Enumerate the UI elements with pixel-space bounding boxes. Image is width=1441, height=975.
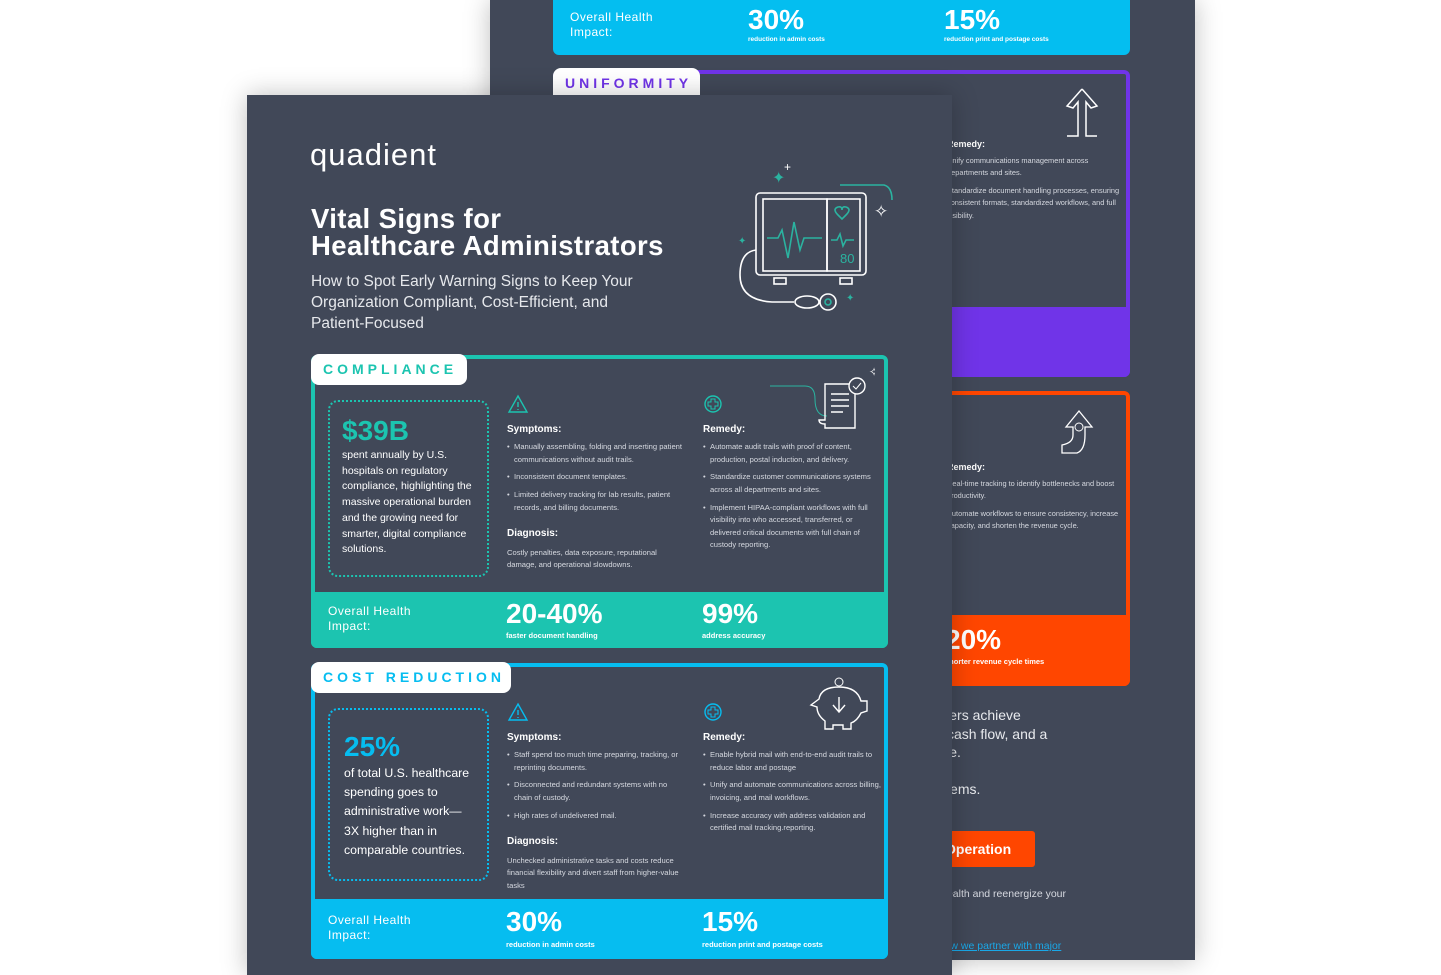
back: cost impact bar	[553, 0, 1130, 55]
impact bar: cost reduction: reduction print and postage costs	[702, 940, 823, 949]
symptoms column: Symptoms:	[507, 732, 561, 743]
back: closing text: minor problems.	[880, 780, 980, 796]
icon: patient monitor	[738, 160, 893, 311]
stat box: $39B: $39B	[342, 415, 409, 446]
remedy column	[703, 395, 871, 549]
icon: medical cross	[704, 395, 722, 413]
symptoms column	[507, 394, 682, 569]
back: orange panel: Real-time tracking to identify bottlenecks and boost productivity.	[947, 479, 1114, 500]
back page: al health and reenergize your	[930, 888, 1066, 900]
symptoms column: Costly penalties, data exposure, reputational damage, and operational slowdowns.	[507, 548, 657, 569]
remedy column: Increase accuracy with address validation and certified mail tracking.reporting.	[710, 811, 865, 832]
back: uniformity tab: UNIFORMITY	[565, 75, 692, 91]
back: orange panel	[553, 391, 1130, 686]
remedy column: Unify and automate communications across billing, invoicing, and mail workflows.	[710, 780, 881, 802]
impact bar: compliance: 99%	[702, 598, 758, 629]
back: uniformity panel: Unify communications management across departments and sites.	[947, 156, 1088, 177]
back: orange panel: shorter revenue cycle times	[945, 657, 1044, 666]
impact bar: compliance: 20-40%	[506, 598, 603, 629]
title: Vital Signs for	[311, 203, 501, 234]
logo: quadient	[310, 137, 437, 172]
title	[311, 203, 664, 261]
impact bar: compliance: Overall Health	[328, 604, 411, 618]
panel: cost reduction	[311, 663, 888, 959]
impact bar: compliance: address accuracy	[702, 631, 765, 640]
symptoms column: Staff spend too much time preparing, tracking, or reprinting documents.	[514, 750, 678, 772]
symptoms column: Disconnected and redundant systems with no chain of custody.	[514, 780, 667, 802]
back: uniformity panel: Remedy:	[947, 139, 985, 149]
icon: arrow gear	[1061, 410, 1094, 454]
symptoms column: Unchecked administrative tasks and costs reduce financial flexibility and divert staff from higher-value tasks	[507, 856, 679, 890]
back: cost impact bar: 15%	[944, 4, 1000, 35]
back: cost impact bar: reduction in admin costs	[748, 36, 825, 43]
title: Healthcare Administrators	[311, 230, 664, 261]
icon: patient monitor: 80	[840, 251, 854, 266]
back page	[490, 0, 1195, 960]
icon: patient monitor: ✧	[874, 202, 888, 221]
back: CTA button	[890, 831, 1035, 867]
remedy column: Implement HIPAA-compliant workflows with full visibility into who accessed, transferred, or delivered critical documents with full chain of custody reporting.	[710, 503, 868, 549]
icon: arrows up	[1066, 88, 1098, 137]
back: cost impact bar: Overall Health	[570, 10, 653, 24]
back: cost impact bar: 30%	[748, 4, 804, 35]
back: orange panel: Remedy:	[947, 462, 985, 472]
icon: warning	[508, 702, 528, 721]
back: closing text: r experience.	[880, 744, 961, 760]
symptoms column: High rates of undelivered mail.	[514, 811, 617, 820]
back: orange panel: 20%	[945, 624, 1001, 655]
icon: patient monitor: ✦	[738, 236, 746, 247]
back: cost impact bar: reduction print and postage costs	[944, 36, 1049, 43]
icon: patient monitor: ✦	[846, 293, 854, 304]
tab: cost reduction: COST REDUCTION	[323, 669, 505, 685]
remedy column: Automate audit trails with proof of content, production, postal induction, and delivery.	[710, 442, 852, 464]
impact bar: cost reduction: Overall Health	[328, 913, 411, 927]
stat box: $39B: spent annually by U.S. hospitals on regulatory compliance, highlighting the massive operational burden and the growing need for smarter, digital compliance solutions.	[342, 449, 472, 555]
impact bar: cost reduction: 30%	[506, 906, 562, 937]
icon: patient monitor: +	[784, 160, 791, 174]
tab: compliance	[311, 354, 467, 385]
back: closing text	[880, 707, 1048, 796]
symptoms column: Inconsistent document templates.	[514, 472, 627, 481]
tab: compliance: COMPLIANCE	[323, 361, 457, 377]
icon: patient monitor: ✦	[772, 170, 785, 187]
remedy column: Enable hybrid mail with end-to-end audit trails to reduce labor and postage	[710, 750, 872, 772]
impact bar: compliance: faster document handling	[506, 631, 598, 640]
impact bar: compliance: Impact:	[328, 619, 371, 633]
back: uniformity tab	[553, 68, 700, 98]
subtitle: How to Spot Early Warning Signs to Keep Your Organization Compliant, Cost-Efficient, and Patient-Focused	[311, 273, 633, 332]
impact bar: compliance	[311, 592, 888, 648]
stat box: 25%: of total U.S. healthcare spending goes to administrative work—3X higher than in comparable countries.	[344, 766, 469, 857]
remedy column: Remedy:	[703, 732, 745, 743]
symptoms column	[507, 702, 679, 890]
back: uniformity panel: Standardize document handling processes, ensuring consistent formats, standardized workflows, and full visibility.	[947, 186, 1119, 220]
remedy column: Standardize customer communications systems across all departments and sites.	[710, 472, 871, 494]
symptoms column: Diagnosis:	[507, 528, 558, 539]
symptoms column: Diagnosis:	[507, 836, 558, 847]
icon: medical cross	[704, 703, 722, 721]
symptoms column: Limited delivery tracking for lab results, patient records, and billing documents.	[514, 490, 670, 512]
impact bar: cost reduction: Impact:	[328, 928, 371, 942]
front page	[247, 95, 952, 975]
back: orange panel: Automate workflows to ensure consistency, increase capacity, and shorten the revenue cycle.	[947, 509, 1118, 530]
icon: piggy bank	[810, 678, 868, 730]
icon: warning	[508, 394, 528, 413]
back page: e how we partner with major	[930, 940, 1061, 952]
stat box: 25%: 25%	[344, 731, 400, 762]
stat box: 25%	[328, 708, 489, 881]
back: uniformity panel	[553, 70, 1130, 377]
impact bar: cost reduction	[311, 899, 888, 959]
impact bar: cost reduction: reduction in admin costs	[506, 940, 595, 949]
symptoms column: Manually assembling, folding and inserting patient communications without audit trails.	[514, 442, 682, 464]
symptoms column: Symptoms:	[507, 424, 561, 435]
remedy column: Remedy:	[703, 424, 745, 435]
back: cost impact bar: Impact:	[570, 25, 613, 39]
icon: document check	[770, 365, 875, 429]
back: closing text: care providers achieve	[880, 707, 1021, 723]
remedy column	[703, 703, 881, 832]
tab: cost reduction	[311, 662, 511, 693]
back: CTA button: Operation	[945, 841, 1011, 857]
stat box: $39B	[328, 400, 489, 577]
back: closing text: and better cash flow, and a	[880, 726, 1047, 742]
impact bar: cost reduction: 15%	[702, 906, 758, 937]
panel: compliance	[311, 355, 888, 648]
